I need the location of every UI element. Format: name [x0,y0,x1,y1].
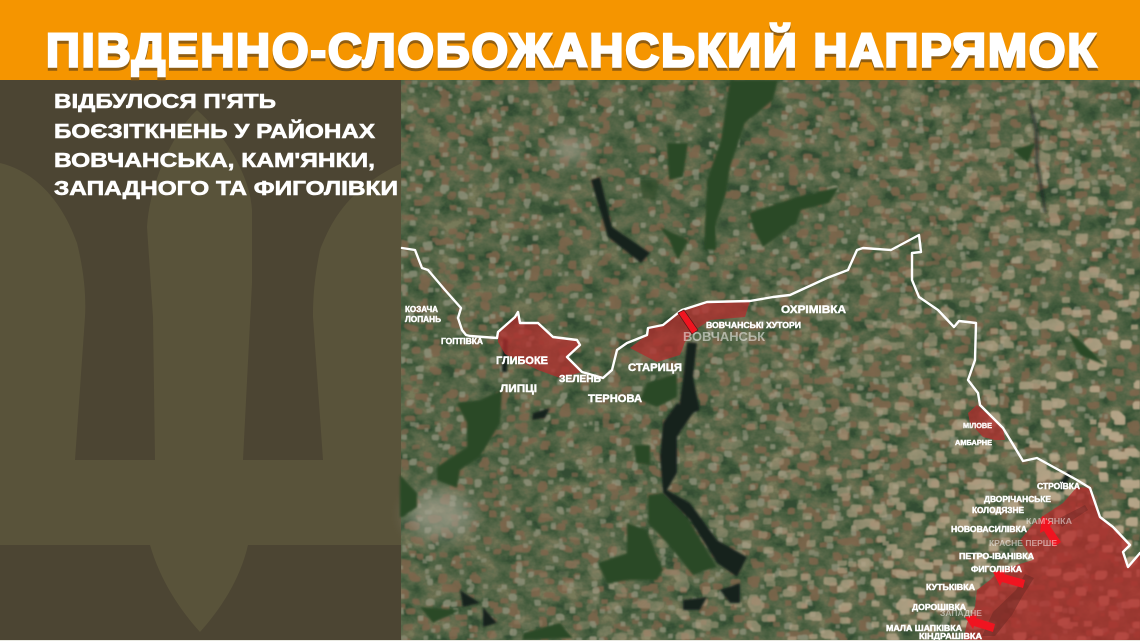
place labels: ДВОРІЧАНСЬКЕ [984,495,1052,504]
place labels: КІНДРАШІВКА [919,632,982,641]
place labels: КРАСНЕ ПЕРШЕ [989,539,1058,548]
icon: trident watermark [0,110,402,632]
text block: summary: ВІДБУЛОСЯ П'ЯТЬ [54,91,276,113]
place labels: СТАРИЦЯ [628,362,682,374]
place labels: ЗЕЛЕНЬ [559,374,601,385]
place labels [405,304,1080,641]
place labels: АМБАРНЕ [955,438,992,447]
heading band [0,0,1140,80]
text block: summary: БОЄЗІТКНЕНЬ У РАЙОНАХ [54,119,376,143]
arrow: Kamianka [1040,516,1061,547]
place labels: МАЛА ШАПКІВКА [886,624,962,633]
text block: summary [54,91,398,200]
place labels: КОЛОДЯЗНЕ [972,506,1025,515]
place labels: ЛИПЦІ [500,383,537,395]
place labels: КУТЬКІВКА [926,583,975,592]
place labels: ДОРОШІВКА [912,603,966,612]
map: satellite background [400,80,1140,641]
occupied zone: Milove [968,405,1005,440]
occupied zone: Hlyboke [498,312,582,378]
text block: summary: ЗАПАДНОГО ТА ФИГОЛІВКИ [54,178,398,200]
place labels: ВОВЧАНСЬК [683,329,765,344]
place labels: ФИГОЛІВКА [971,565,1022,574]
place labels: КОЗАЧА [405,305,438,314]
arrow: Zakhidne [965,615,995,632]
occupied zone: south-east [963,487,1140,641]
panel: left text panel [0,80,402,641]
place labels: ЛОПАНЬ [405,315,441,324]
place labels: ЗАПАДНЕ [940,609,983,618]
place labels: СТРОЇВКА [1037,482,1080,491]
title: ПІВДЕННО-СЛОБОЖАНСЬКИЙ НАПРЯМОК [46,26,1096,80]
text block: summary: ВОВЧАНСЬКА, КАМ'ЯНКИ, [54,150,375,172]
occupied zone: Vovchansk [630,301,750,362]
place labels: НОВОВАСИЛІВКА [951,525,1027,534]
arrow: Fyholivka [993,570,1025,588]
arrow: Vovchansk [678,310,698,334]
place labels: ГЛИБОКЕ [496,355,548,367]
place labels: ПЕТРО-ІВАНІВКА [959,552,1034,561]
place labels: ТЕРНОВА [588,393,642,405]
place labels: ОХРІМІВКА [781,304,846,316]
place labels: КАМ'ЯНКА [1026,517,1072,526]
place labels: МІЛОВЕ [963,421,992,430]
place labels: ГОПТІВКА [441,337,483,346]
place labels: ВОВЧАНСЬКІ ХУТОРИ [706,320,801,330]
front line [402,235,1140,567]
title: ПІВДЕННО-СЛОБОЖАНСЬКИЙ НАПРЯМОК [46,24,1096,76]
